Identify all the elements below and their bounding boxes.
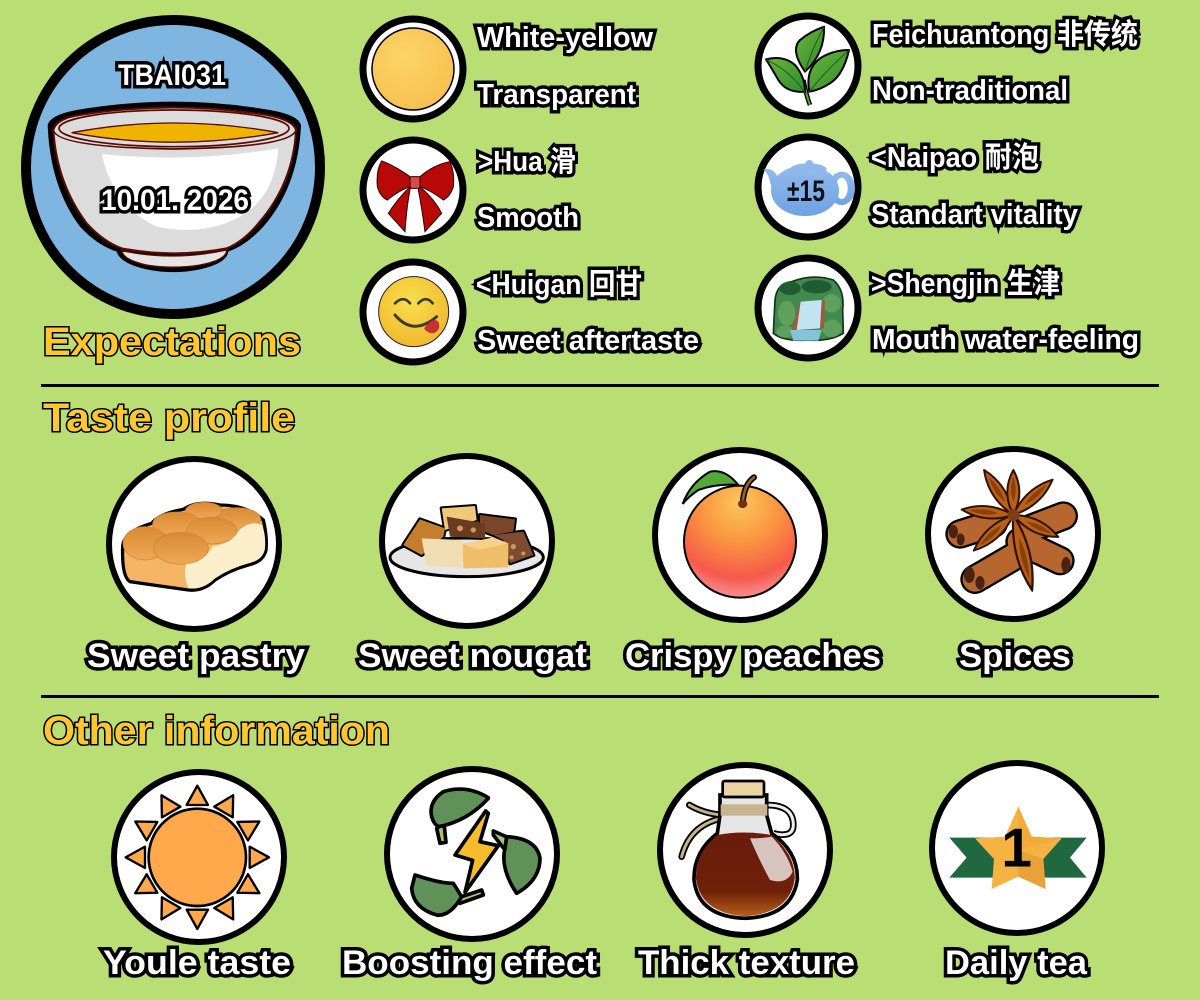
tea badge: blue circle with bowl [26, 20, 320, 314]
label: youle taste: Youle taste [103, 944, 291, 982]
label: sweet nougat: Sweet nougat [358, 637, 587, 675]
shengjin translation: Mouth water-feeling [872, 324, 1139, 356]
icon: cinnamon and star anise [928, 449, 1098, 619]
icon: syrup bottle [660, 765, 830, 935]
shengjin label: >Shengjin 生津 [871, 267, 1060, 300]
icon: ribbon star number one: 1 [1001, 817, 1032, 879]
label: sweet pastry: Sweet pastry [87, 637, 305, 675]
label: crispy peaches: Crispy peaches [625, 637, 881, 675]
anise star petals [961, 467, 1061, 592]
badge date: 10.01. 2026 [101, 184, 249, 217]
vitality label: <Naipao 耐泡 [871, 141, 1039, 174]
icon: teapot [758, 137, 858, 237]
vitality translation: Standart vitality [871, 199, 1078, 231]
icon: teapot: ±15 [787, 175, 825, 208]
icon: ribbon star number one [932, 763, 1102, 933]
clarity label: Transparent [477, 79, 636, 111]
icon: red bow [363, 140, 463, 240]
panel: taste profile [43, 396, 1098, 675]
heading: expectations: Expectations [43, 320, 301, 364]
icon: boosting bolt and leaves [387, 769, 557, 939]
smoothness label: >Hua 滑 [478, 145, 576, 178]
icon: tea leaves [758, 16, 858, 116]
heading: other information: Other information [43, 709, 390, 753]
icon: jungle waterfall [758, 258, 858, 358]
panel: other information [43, 709, 1102, 982]
aftertaste translation: Sweet aftertaste [477, 325, 699, 357]
label: daily tea: Daily tea [945, 944, 1088, 982]
icon: tea bowl [48, 102, 301, 272]
icon: sun [114, 772, 284, 942]
style label: Feichuantong 非传统 [872, 18, 1138, 51]
badge code: TBAI031 [118, 59, 226, 92]
panel: expectations [26, 16, 1139, 364]
label: thick texture: Thick texture [638, 944, 855, 982]
icon: liquor colour [363, 19, 463, 119]
huigan label: <Huigan 回甘 [476, 268, 642, 301]
style translation: Non-traditional [872, 75, 1068, 107]
heading: taste profile: Taste profile [43, 396, 295, 440]
smoothness translation: Smooth [477, 202, 579, 234]
colour label: White-yellow [477, 22, 653, 54]
icon: bread pastry [109, 459, 279, 629]
icon: smiling face [363, 262, 463, 362]
label: spices: Spices [959, 637, 1071, 675]
icon: plate of nougat [382, 456, 552, 626]
icon: peach [655, 450, 825, 620]
label: boosting effect: Boosting effect [342, 944, 597, 982]
